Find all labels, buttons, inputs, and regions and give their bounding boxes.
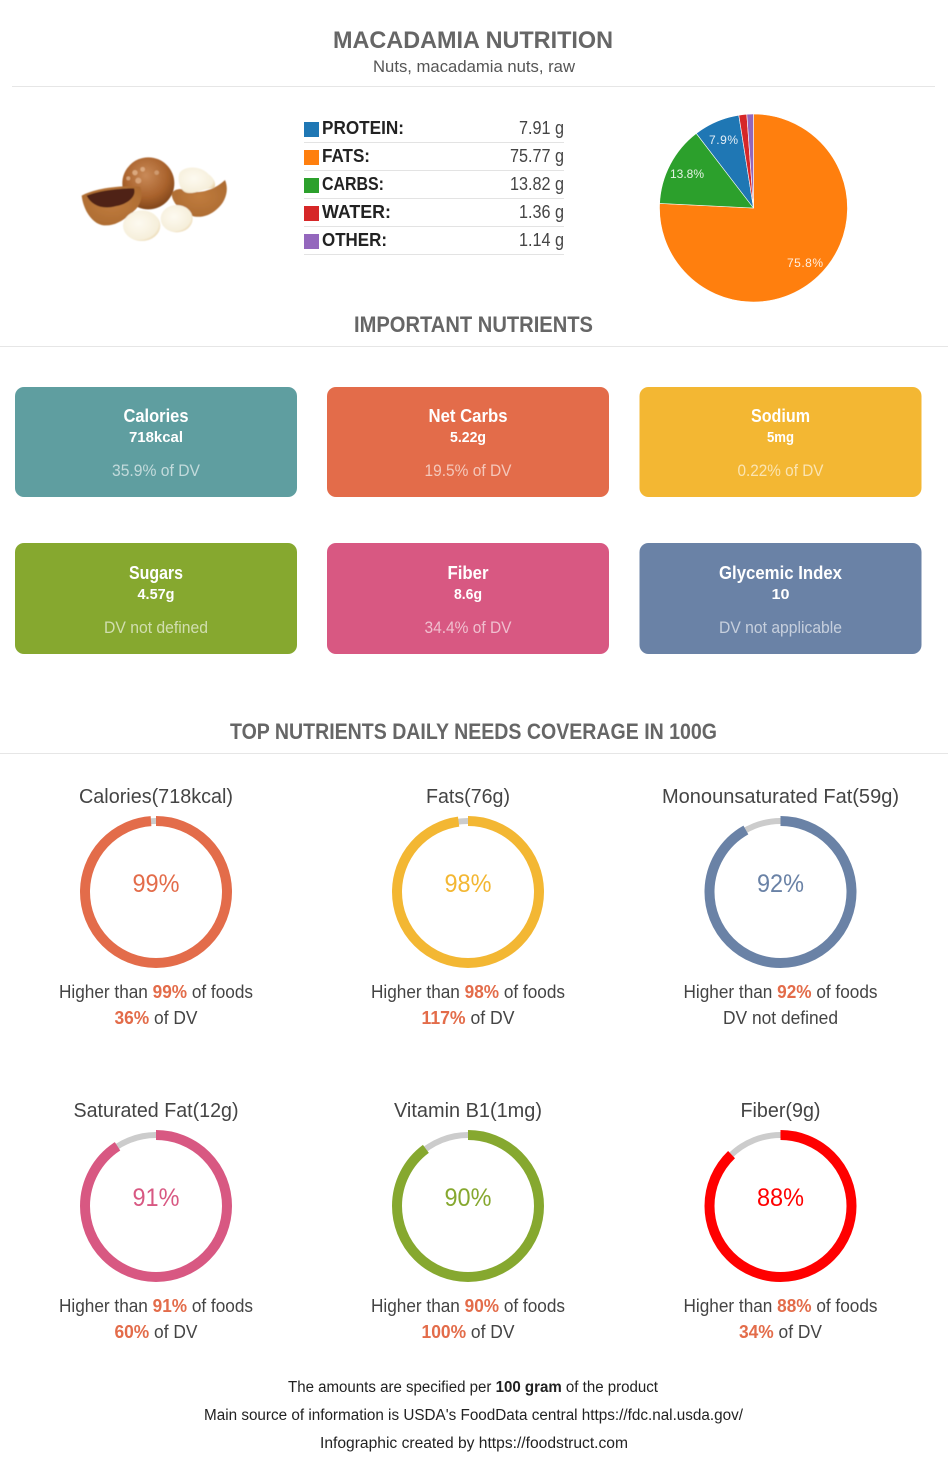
panel: fats coverage: Higher than 98% of foods	[371, 982, 565, 1002]
card: sugars: DV not defined	[104, 618, 208, 637]
subtitle: Nuts, macadamia nuts, raw	[373, 57, 576, 76]
card: fiber: 34.4% of DV	[424, 618, 512, 637]
card: sodium: Sodium	[751, 406, 810, 426]
pie chart: 7.9%	[709, 133, 738, 147]
row: other: 1.14 g	[519, 230, 564, 250]
row: other	[304, 230, 564, 250]
panel: vitamin b1 coverage	[371, 1100, 565, 1342]
footer notes: Main source of information is USDA's FoodData central https://fdc.nal.usda.gov/	[204, 1407, 744, 1424]
card: net carbs: 19.5% of DV	[424, 461, 512, 480]
card: calories: 35.9% of DV	[112, 461, 201, 480]
panel: saturated fat coverage: Higher than 91% of foods	[59, 1296, 253, 1316]
card: sugars: 4.57g	[138, 586, 174, 603]
card: sodium: 0.22% of DV	[738, 461, 824, 480]
panel: calories coverage: Higher than 99% of foods	[59, 982, 253, 1002]
row: carbs: 13.82 g	[510, 174, 564, 194]
card: calories	[15, 387, 297, 497]
footer notes: The amounts are specified per 100 gram of the product	[288, 1379, 659, 1396]
panel: saturated fat coverage: Saturated Fat(12g)	[74, 1100, 238, 1122]
panel: saturated fat coverage: 91%	[132, 1184, 180, 1212]
row: water: 1.36 g	[519, 202, 564, 222]
pie chart: 75.8%	[787, 256, 823, 270]
nutrient table	[304, 118, 564, 255]
row: protein: PROTEIN:	[322, 118, 404, 138]
footer notes	[204, 1379, 744, 1452]
row: other: OTHER:	[322, 230, 387, 250]
row: fats	[304, 146, 564, 166]
card: calories: Calories	[124, 406, 188, 426]
panel: fiber coverage: 88%	[757, 1184, 804, 1212]
card: net carbs: Net Carbs	[428, 406, 508, 426]
pie chart	[659, 114, 847, 302]
card: sodium	[640, 387, 922, 497]
card: glycemic index: Glycemic Index	[719, 563, 842, 583]
panel: monounsaturated fat coverage	[662, 786, 899, 1028]
heading: important nutrients: IMPORTANT NUTRIENTS	[354, 312, 593, 337]
panel: fiber coverage: Higher than 88% of foods	[684, 1296, 878, 1316]
icon: macadamia nuts	[82, 157, 227, 241]
panel: monounsaturated fat coverage: 92%	[757, 870, 804, 898]
panel: calories coverage: Calories(718kcal)	[79, 786, 233, 808]
card: glycemic index: 10	[772, 586, 790, 603]
panel: fiber coverage: 34% of DV	[739, 1322, 822, 1342]
panel: monounsaturated fat coverage: Higher than 92% of foods	[684, 982, 878, 1002]
panel: fats coverage: 117% of DV	[422, 1008, 514, 1028]
pie chart: 13.8%	[670, 167, 704, 181]
card: calories: 718kcal	[129, 429, 183, 446]
footer notes: Infographic created by https://foodstruct.com	[320, 1435, 628, 1452]
card: glycemic index	[640, 543, 922, 654]
title: MACADAMIA NUTRITION	[333, 27, 613, 54]
card: fiber	[327, 543, 609, 654]
panel: fats coverage: 98%	[444, 870, 492, 898]
panel: vitamin b1 coverage: Vitamin B1(1mg)	[394, 1100, 542, 1122]
card: fiber: 8.6g	[454, 586, 482, 603]
panel: monounsaturated fat coverage: DV not defined	[723, 1008, 838, 1028]
panel: fiber coverage: Fiber(9g)	[740, 1100, 820, 1122]
row: water	[304, 202, 564, 222]
panel: saturated fat coverage: 60% of DV	[114, 1322, 198, 1342]
panel: fats coverage: Fats(76g)	[426, 786, 510, 808]
panel: saturated fat coverage	[59, 1100, 253, 1342]
row: water: WATER:	[322, 202, 391, 222]
panel: monounsaturated fat coverage: Monounsaturated Fat(59g)	[662, 786, 899, 808]
card: fiber: Fiber	[448, 563, 488, 583]
panel: vitamin b1 coverage: 100% of DV	[422, 1322, 514, 1342]
card: sodium: 5mg	[767, 429, 794, 446]
panel: calories coverage: 99%	[132, 870, 180, 898]
card: net carbs	[327, 387, 609, 497]
panel: vitamin b1 coverage: 90%	[444, 1184, 492, 1212]
panel: calories coverage	[59, 786, 253, 1028]
panel: calories coverage: 36% of DV	[114, 1008, 198, 1028]
panel: vitamin b1 coverage: Higher than 90% of foods	[371, 1296, 565, 1316]
row: carbs: CARBS:	[322, 174, 384, 194]
card: sugars	[15, 543, 297, 654]
card: sugars: Sugars	[129, 563, 183, 583]
card: net carbs: 5.22g	[450, 429, 486, 446]
row: fats: FATS:	[322, 146, 370, 166]
card: glycemic index: DV not applicable	[719, 618, 842, 637]
heading: top nutrients coverage: TOP NUTRIENTS DAILY NEEDS COVERAGE IN 100G	[230, 719, 717, 744]
panel: fats coverage	[371, 786, 565, 1028]
row: protein	[304, 118, 564, 138]
panel: fiber coverage	[684, 1100, 878, 1342]
row: fats: 75.77 g	[510, 146, 564, 166]
row: carbs	[304, 174, 564, 194]
row: protein: 7.91 g	[519, 118, 564, 138]
